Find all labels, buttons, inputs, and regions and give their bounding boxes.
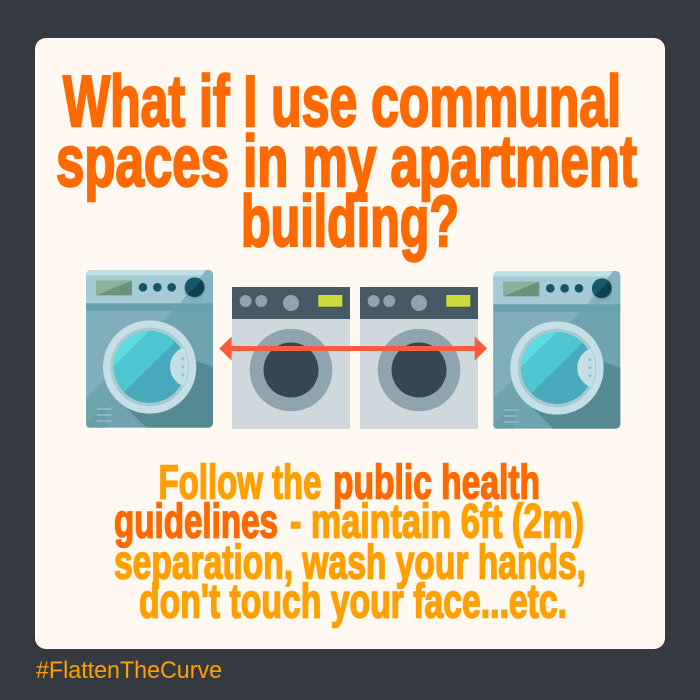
text block: guidelines bbox=[114, 456, 586, 628]
text block: guidelines: public health bbox=[333, 456, 540, 510]
text block: guidelines: - maintain 6ft (2m) bbox=[290, 496, 584, 548]
icon: teal washing machine right bbox=[493, 271, 620, 429]
icon: teal washing machine left bbox=[86, 270, 213, 428]
icon: grey washing machine right bbox=[360, 287, 478, 429]
icon: grey washing machine left bbox=[232, 287, 350, 429]
arrow: double-headed separation arrow bbox=[219, 336, 487, 361]
panel: main card bbox=[35, 38, 665, 649]
title bbox=[56, 62, 637, 262]
text block: guidelines: Follow the bbox=[158, 456, 322, 510]
hashtag: #FlattenTheCurve bbox=[36, 657, 222, 684]
text block: guidelines: guidelines bbox=[114, 496, 278, 548]
title: building? bbox=[241, 182, 459, 262]
